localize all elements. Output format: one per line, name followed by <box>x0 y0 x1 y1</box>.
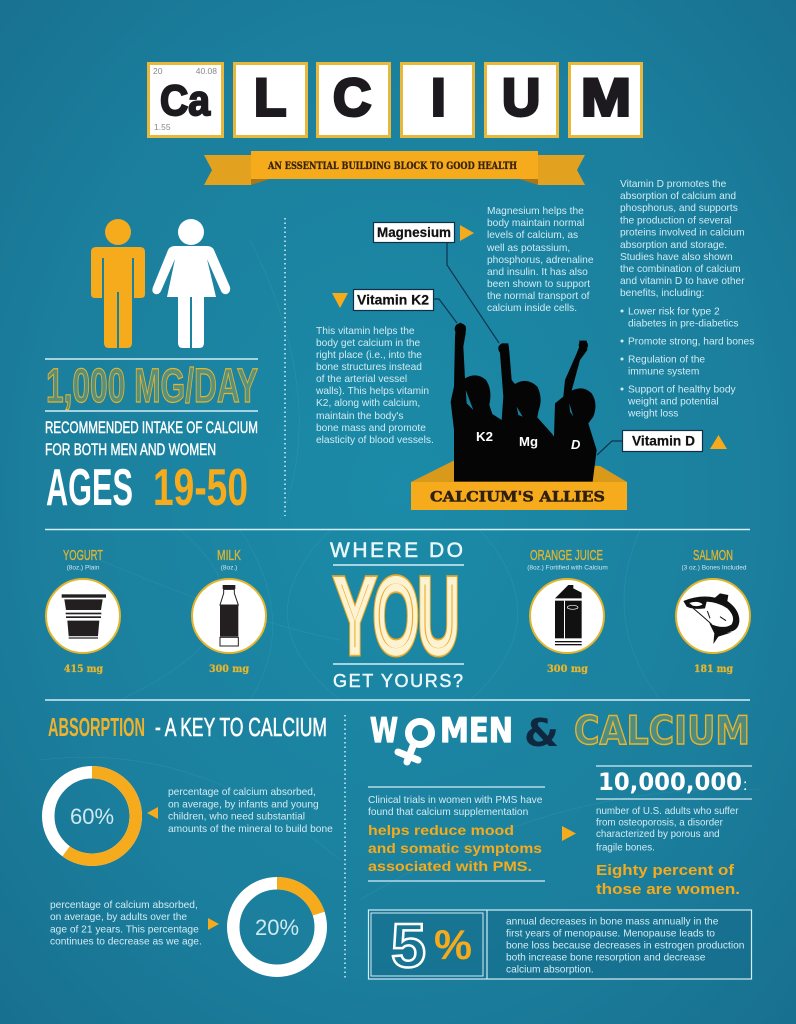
podium <box>411 460 627 510</box>
text block: osteoporosis: those are women. <box>596 882 740 898</box>
text: vitamin d description: absorption of calcium and <box>620 191 736 202</box>
tile: U: U <box>502 68 540 128</box>
text: adults: on average, by adults over the <box>50 912 187 923</box>
ribbon: tagline: AN ESSENTIAL BUILDING BLOCK TO GOOD HEALTH <box>267 161 517 172</box>
text block: osteoporosis <box>596 766 752 898</box>
label: recommended intake line 1: RECOMMENDED INTAKE OF CALCIUM <box>45 419 258 437</box>
text: vitamin d description: Regulation of the <box>628 354 705 366</box>
text: vitamin k2 description: maintain the body's <box>316 411 403 422</box>
text block: osteoporosis: number of U.S. adults who suffer <box>596 806 739 817</box>
heading: women & calcium: & <box>524 711 559 755</box>
text: magnesium description: levels of calcium, as <box>487 230 578 241</box>
heading: women & calcium <box>370 709 750 762</box>
tile: C <box>318 64 390 136</box>
callout: 5% <box>368 910 752 981</box>
food: yogurt: YOGURT <box>63 547 103 564</box>
label: Mg: Mg <box>519 434 538 449</box>
text: vitamin d description: weight and potential <box>627 396 719 408</box>
text: magnesium description: and insulin. It has also <box>487 267 588 278</box>
text: infants: on average, by infants and young <box>168 800 319 810</box>
tile: Ca: 40.08 <box>196 66 217 76</box>
text block: recommended intake <box>45 359 258 517</box>
label: D: D <box>571 437 581 452</box>
tag: vitamin k2 <box>332 290 434 310</box>
text block: PMS: helps reduce mood <box>368 822 514 838</box>
text: infants: percentage of calcium absorbed, <box>168 787 316 798</box>
food: yogurt: (8oz.) Plain <box>67 564 100 572</box>
heading: women & calcium: MEN <box>440 711 513 751</box>
food: salmon <box>676 547 750 675</box>
tile: M: M <box>581 68 631 128</box>
text: vitamin d description: and vitamin D to have other <box>620 276 745 287</box>
text: vitamin d description: immune system <box>628 366 699 378</box>
text: infants: amounts of the mineral to build bone <box>168 824 333 835</box>
text block: osteoporosis: characterized by porous and <box>596 829 720 840</box>
text block: PMS: and somatic symptoms <box>368 840 542 856</box>
label: K2: K2 <box>476 429 493 444</box>
tile: L: L <box>254 68 286 128</box>
text: adults <box>50 900 202 948</box>
icon: venus symbol <box>398 722 432 762</box>
text block: PMS: associated with PMS. <box>368 858 532 874</box>
text: vitamin k2 description: This vitamin helps the <box>316 326 415 337</box>
heading word: you: YOU <box>336 559 459 673</box>
text: vitamin k2 description: of the arterial vessel <box>316 374 407 385</box>
text block: osteoporosis: 10,000,000 <box>598 768 742 796</box>
text: vitamin k2 description: right place (i.e., into the <box>316 350 422 361</box>
tag: magnesium: Magnesium <box>377 225 451 240</box>
text: vitamin k2 description: walls). This helps vitamin <box>315 386 429 397</box>
heading: absorption <box>48 712 327 742</box>
text: vitamin d description: Promote strong, hard bones <box>628 336 754 348</box>
connector lines <box>434 243 622 455</box>
label: ages: AGES <box>46 459 133 517</box>
food: orange juice <box>527 547 608 675</box>
arrow <box>147 807 158 819</box>
donut chart: 60%: 60% <box>70 804 114 829</box>
text: vitamin k2 description: body get calcium in the <box>316 338 421 349</box>
tile: Ca <box>148 64 222 136</box>
tile: C: C <box>333 68 371 128</box>
donut chart: 20% <box>233 883 321 971</box>
tile: Ca: 1.55 <box>154 122 171 132</box>
heading word: you: YOU <box>336 559 459 673</box>
heading: where do you get yours <box>330 539 464 691</box>
tile: M <box>570 64 642 136</box>
tag: vitamin k2: Vitamin K2 <box>357 292 429 308</box>
text: magnesium description: been shown to support <box>487 279 590 290</box>
callout: 5%: % <box>434 921 472 968</box>
food: orange juice: 300 mg <box>547 663 589 675</box>
tile: L <box>234 64 306 136</box>
text: magnesium description <box>486 206 594 314</box>
text: adults: percentage of calcium absorbed, <box>50 900 198 911</box>
text: vitamin d description: phosphorus, and supports <box>620 203 738 214</box>
text block: osteoporosis: fragile bones. <box>596 842 655 854</box>
tag: vitamin d <box>622 430 727 452</box>
text block: PMS: found that calcium supplementation <box>368 807 528 818</box>
text: vitamin d description: weight loss <box>627 408 678 420</box>
text: magnesium description: the normal transport of <box>487 291 590 302</box>
food: yogurt <box>46 547 120 675</box>
text: magnesium description: Magnesium helps the <box>487 206 584 217</box>
text: magnesium description: phosphorus, adrenaline <box>487 255 594 266</box>
text: vitamin d description: absorption and storage. <box>620 240 727 251</box>
donut chart: 60% <box>48 772 136 860</box>
ribbon: tagline <box>204 151 585 185</box>
title: Calcium element tiles <box>148 64 642 136</box>
text: magnesium description: well as potassium, <box>486 243 570 254</box>
text: vitamin d description: Lower risk for type 2 <box>628 306 720 318</box>
arrow <box>562 826 576 841</box>
text: infants <box>168 787 333 835</box>
food: salmon: SALMON <box>693 547 733 564</box>
text block: osteoporosis: Eighty percent of <box>596 863 734 879</box>
text: vitamin d description: Studies have also shown <box>620 252 733 263</box>
text: vitamin k2 description <box>315 326 434 446</box>
silhouette: three raised fists <box>451 323 597 482</box>
text: vitamin k2 description: bone structures instead <box>316 362 422 373</box>
tile: Ca: 20 <box>153 66 163 76</box>
food: milk: MILK <box>217 547 241 564</box>
text: vitamin k2 description: K2, along with calcium, <box>316 398 420 409</box>
panel: absorption <box>48 712 333 971</box>
food: salmon: (3 oz.) Bones Included <box>681 564 747 572</box>
panel: calcium's allies <box>315 179 754 510</box>
food: milk: (8oz.) <box>221 564 237 572</box>
text: vitamin d description: benefits, including: <box>620 288 704 299</box>
text: vitamin d description: Vitamin D promotes the <box>620 179 727 190</box>
food: milk: 300 mg <box>209 663 250 675</box>
heading: women & calcium: CALCIUM <box>574 709 750 754</box>
tile: I <box>402 64 474 136</box>
text block: PMS <box>368 787 545 881</box>
tag: magnesium <box>374 222 474 242</box>
text: adults: continues to decrease as we age. <box>50 936 202 948</box>
label: 19-50: 19-50 <box>153 459 248 517</box>
heading line: where do: WHERE DO <box>330 539 463 562</box>
text block: osteoporosis: : <box>743 777 747 794</box>
food: yogurt: 415 mg <box>64 663 104 675</box>
text: vitamin k2 description: bone mass and promote <box>316 423 426 434</box>
food: orange juice: (8oz.) Fortified with Calcium <box>527 564 608 572</box>
food: orange juice: ORANGE JUICE <box>530 547 603 564</box>
donut chart: 20%: 20% <box>255 915 299 940</box>
text block: PMS: Clinical trials in women with PMS have <box>368 795 543 806</box>
text: adults: age of 21 years. This percentage <box>50 924 199 936</box>
food: milk <box>192 547 266 675</box>
callout: 5%: annual decreases in bone mass annually in the <box>506 916 719 928</box>
food: salmon: 181 mg <box>694 663 734 675</box>
text: magnesium description: calcium inside cells. <box>487 303 577 314</box>
icon: woman <box>152 219 230 348</box>
heading word: you <box>336 559 459 673</box>
text: magnesium description: body maintain normal <box>487 218 584 229</box>
text block: osteoporosis: from osteoporosis, a disorder <box>596 818 724 828</box>
panel: women and calcium <box>368 709 752 981</box>
text: vitamin d description: Support of healthy body <box>628 384 737 396</box>
callout: 5%: both increase bone resorption and decrease <box>506 952 706 964</box>
arrow <box>208 918 219 930</box>
callout: 5%: bone loss because decreases in estrogen production <box>506 940 744 952</box>
callout: 5%: calcium absorption. <box>506 964 594 976</box>
callout: 5%: first years of menopause. Menopause leads to <box>506 928 715 940</box>
tag: vitamin d: Vitamin D <box>632 434 695 448</box>
podium: CALCIUM'S ALLIES <box>430 490 605 506</box>
heading: absorption: ABSORPTION <box>48 712 145 742</box>
icon: man <box>91 219 145 348</box>
text: vitamin d description: the production of several <box>620 216 732 226</box>
heading: women & calcium: W <box>370 711 398 751</box>
text: vitamin d description: the combination of calcium <box>620 264 741 275</box>
text: vitamin d description <box>620 179 754 420</box>
tile: U <box>486 64 558 136</box>
callout: 5%: 5 <box>391 912 426 981</box>
tile: I: I <box>431 68 446 128</box>
stat: 1,000 mg/day: 1,000 MG/DAY <box>46 360 258 413</box>
text: vitamin d description: proteins involved in calcium <box>620 228 745 238</box>
tile: Ca: Ca <box>160 77 211 125</box>
heading: absorption: - A KEY TO CALCIUM <box>155 712 327 742</box>
text: vitamin d description: diabetes in pre-diabetics <box>628 318 738 330</box>
text: vitamin k2 description: elasticity of blood vessels. <box>316 435 434 446</box>
label: recommended intake line 2: FOR BOTH MEN AND WOMEN <box>45 441 216 459</box>
heading line: get yours: GET YOURS? <box>333 671 463 691</box>
text: infants: children, who need substantial <box>168 812 305 822</box>
